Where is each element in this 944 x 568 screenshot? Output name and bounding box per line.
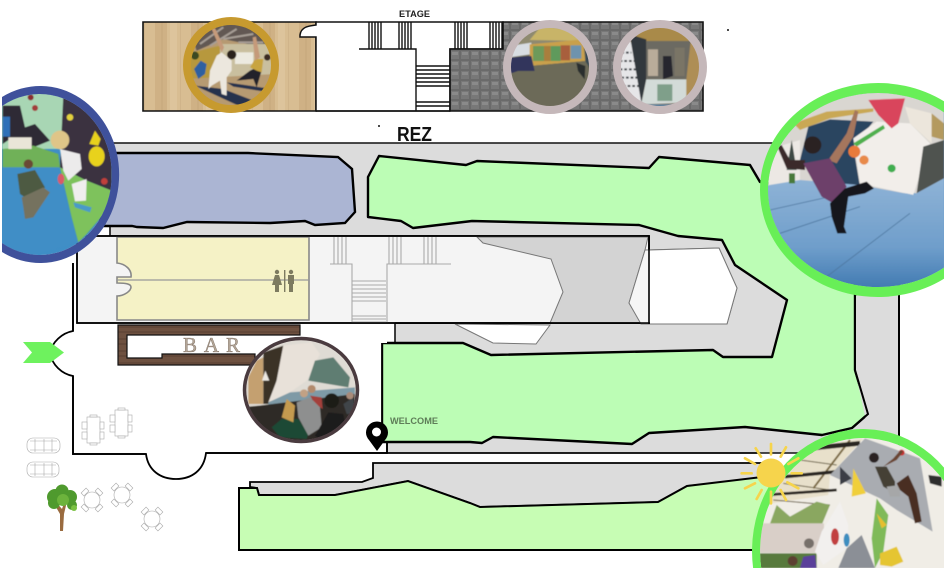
interior stairs xyxy=(330,237,451,323)
bar wood frame xyxy=(118,325,300,365)
gym rubber floor xyxy=(450,22,703,111)
zone: blue climbing area xyxy=(100,153,355,228)
upper stairs xyxy=(316,22,502,111)
lower strip corridor xyxy=(250,463,770,507)
box right wall xyxy=(395,236,650,324)
pin marker xyxy=(366,421,388,451)
stray dots xyxy=(378,29,729,127)
pin xyxy=(366,421,388,451)
toilets zone xyxy=(117,237,309,320)
outdoor furniture xyxy=(27,408,163,531)
label: etage: ETAGE xyxy=(399,9,430,20)
floor plan: upper floor (etage) xyxy=(143,22,703,111)
corridor grey floor xyxy=(110,143,899,453)
zone: white room at right xyxy=(629,248,737,324)
table 2 xyxy=(110,408,132,438)
photo: outdoor climbing xyxy=(752,429,944,568)
central building box xyxy=(77,236,649,344)
sun rays xyxy=(742,444,802,503)
round table 2 xyxy=(111,483,133,507)
zone: green climbing area xyxy=(368,156,868,444)
table 1 xyxy=(82,415,104,445)
sun disc xyxy=(756,458,786,488)
bar counter xyxy=(118,325,300,365)
label: rez: REZ xyxy=(397,124,432,146)
entrance building outline xyxy=(50,263,387,479)
box outline on top xyxy=(77,236,649,323)
central white landing xyxy=(300,22,503,111)
bar label: BAR xyxy=(183,333,240,357)
white space beside box xyxy=(75,324,387,452)
round table 3 xyxy=(141,507,163,531)
photo: staircase xyxy=(613,23,705,110)
zone: lower green terrace xyxy=(239,476,770,550)
entrance arrow xyxy=(23,342,64,363)
welcome label: WELCOME xyxy=(390,416,438,426)
wall lines on right xyxy=(852,280,899,453)
yoga room wood floor xyxy=(143,22,316,111)
round table 1 xyxy=(81,488,103,512)
icon: tree xyxy=(47,484,77,531)
zone: green right wall edge cover xyxy=(855,296,898,430)
car 2 xyxy=(27,462,59,477)
photo: gym xyxy=(505,23,595,114)
photo: child climbing xyxy=(2,86,119,263)
foliage xyxy=(47,484,77,511)
photo: woman climbing xyxy=(760,83,944,297)
white room main xyxy=(649,248,737,324)
zone: grey interior floor xyxy=(477,237,648,323)
pin hole xyxy=(372,428,381,436)
zone: white alcove below box xyxy=(455,324,550,344)
street line xyxy=(387,452,760,454)
icon: toilets xyxy=(272,270,294,292)
photo: bar crowd xyxy=(244,338,358,446)
trunk xyxy=(53,497,68,531)
box background xyxy=(77,236,649,323)
entrance left wall redraw xyxy=(73,263,387,454)
icon: sun xyxy=(742,444,802,503)
car 1 xyxy=(27,438,60,453)
photo: yoga xyxy=(185,21,275,114)
restroom divider xyxy=(117,279,309,281)
